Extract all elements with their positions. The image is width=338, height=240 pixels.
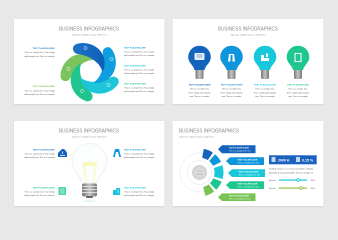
text block: left top: add sample text This is a sample	[24, 55, 55, 58]
text block: bulb 4: TEXT PLACEHOLDER	[287, 84, 309, 86]
text block: left bottom: This is a sample text. You simply	[24, 89, 55, 92]
text block: right top: TEXT PLACEHOLDER	[124, 46, 146, 50]
text block: bulb 4	[287, 84, 310, 98]
text block: left bottom: add sample text This is a sample	[24, 93, 55, 96]
icon: document green	[58, 187, 66, 195]
text block: bulb 2: This is a sample text.	[222, 88, 242, 90]
bulb: cyan	[254, 46, 276, 79]
text block: bottom left: This is a sample text. You simply	[24, 190, 55, 193]
paragraph: Today, there is a text example simply	[269, 168, 314, 170]
text block: right top: This is a sample text. You simply	[124, 50, 155, 54]
ribbon 5: TEXT PLACEHOLDER	[229, 194, 249, 198]
text block: top left	[24, 148, 55, 159]
stats box	[269, 155, 317, 164]
text block: right bottom: TEXT PLACEHOLDER	[124, 82, 146, 86]
title: large bulb slide: BUSINESS INFOGRAPHICS	[59, 128, 119, 134]
text block: right middle: This is a sample text. You simply	[124, 68, 155, 72]
text block: right top	[124, 46, 155, 57]
text block: right top: add sample text This is a sample	[124, 54, 155, 57]
text block: left top	[24, 47, 55, 58]
fan segments	[172, 145, 227, 200]
bulb: dark blue	[188, 46, 211, 79]
text block: bulb 2: TEXT PLACEHOLDER	[221, 84, 243, 86]
petal: green	[63, 62, 105, 104]
petal: dark blue	[73, 43, 105, 72]
subtitle: fan slide: Type the subtitle of your slide here	[179, 136, 214, 138]
center circle: TEXT	[197, 171, 203, 173]
text block: left bottom	[24, 85, 55, 96]
large light bulb	[72, 144, 107, 202]
panel: swirl slide	[14, 19, 164, 104]
swirl chart	[58, 43, 121, 104]
text block: left bottom: TEXT PLACEHOLDER	[33, 85, 55, 88]
title: fan slide: BUSINESS INFOGRAPHICS	[179, 128, 239, 134]
petal: lime	[58, 49, 96, 88]
text block: right bottom	[124, 82, 155, 93]
text block: left top: This is a sample text. You simply	[24, 51, 55, 54]
text block: bottom right: This is a sample text. You simply	[124, 190, 155, 193]
subtitle: bulbs slide: Type the subtitle of your slide here	[230, 34, 266, 36]
text block: bulb 2	[220, 84, 243, 98]
center circle: HERE	[197, 174, 203, 176]
center circle	[192, 165, 207, 180]
ribbon 4: This is a sample text. You	[238, 185, 259, 188]
text block: top left: TEXT PLACEHOLDER	[33, 148, 55, 152]
text block: bulb 3: TEXT PLACEHOLDER	[254, 84, 276, 86]
slider 1: 80%	[311, 180, 315, 182]
text block: bulb 4: This is a sample text.	[288, 88, 308, 90]
slider 2	[269, 187, 315, 190]
dashed rings	[180, 153, 219, 192]
stats box: 0.15 %	[302, 159, 314, 163]
title: swirl slide: BUSINESS INFOGRAPHICS	[59, 26, 119, 32]
subtitle: swirl slide: Type the subtitle of your slide here	[72, 34, 107, 36]
icon: team cyan	[113, 188, 120, 195]
text block: bulb 2: Ever simply add sample	[220, 91, 243, 94]
petal: cyan	[78, 60, 121, 102]
ribbon 5	[218, 193, 256, 201]
text block: top right	[124, 148, 155, 159]
text block: bulb 1: text. This is a sample	[190, 95, 210, 98]
ribbon 1: This is a sample text. You	[229, 150, 250, 152]
subtitle: large bulb slide: Type the subtitle of your slide here	[72, 136, 107, 138]
text block: right middle	[124, 64, 155, 75]
text block: bulb 4: Ever simply add sample	[287, 91, 310, 94]
ribbon 4	[226, 181, 264, 189]
slider 1	[269, 179, 315, 182]
stats box: 2000 K	[278, 159, 290, 163]
icon: people dark blue	[58, 149, 67, 157]
text block: top right: TEXT PLACEHOLDER	[124, 148, 146, 152]
text block: bulb 2: text. This is a sample	[222, 95, 242, 98]
text block: bulb 3: Ever simply add sample	[254, 91, 277, 94]
title: bulbs slide: BUSINESS INFOGRAPHICS	[218, 26, 278, 32]
ribbon 2: This is a sample text. You	[238, 161, 259, 164]
ribbon 3	[228, 169, 265, 177]
paragraph: Sample text placeholder of the sample is	[269, 172, 313, 174]
ribbon 1	[218, 145, 256, 153]
icon: handshake light blue	[113, 149, 121, 157]
text block: bulb 3: text. This is a sample	[255, 95, 276, 98]
ribbon 3: TEXT PLACEHOLDER	[238, 170, 259, 173]
panel: large bulb slide	[14, 121, 164, 206]
text block: bulb 3: This is a sample text.	[255, 88, 275, 90]
ribbon 1: TEXT PLACEHOLDER	[229, 146, 249, 150]
text block: top right: add sample text This is a sample	[124, 156, 155, 159]
text block: bulb 4: text. This is a sample	[288, 95, 309, 98]
slider 2: Search	[269, 187, 276, 190]
text block: bulb 3	[254, 84, 277, 98]
text block: right bottom: This is a sample text. You simply	[124, 86, 155, 90]
petal: light blue	[84, 46, 121, 85]
text block: bottom left: TEXT PLACEHOLDER	[33, 186, 55, 190]
text block: bulb 1: TEXT PLACEHOLDER	[189, 84, 211, 86]
petal icons	[67, 46, 113, 92]
text block: right middle: add sample text This is a sample	[124, 72, 155, 75]
text block: bottom right: add sample text This is a sample	[124, 194, 155, 197]
text block: top left: This is a sample text. You simply	[24, 152, 55, 155]
ribbon 2: TEXT PLACEHOLDER	[238, 158, 258, 161]
ribbon 2	[226, 157, 264, 165]
text block: top right: This is a sample text. You simply	[124, 152, 155, 155]
text block: top left: add sample text This is a sample	[24, 156, 55, 159]
text block: bottom left: add sample text This is a sample	[24, 194, 55, 197]
slider 2: 80%	[311, 188, 315, 190]
text block: bottom right	[124, 186, 155, 197]
text block: bottom left	[24, 186, 55, 197]
ribbon 3: This is a sample text. You	[238, 173, 260, 176]
text block: right bottom: add sample text This is a sample	[124, 90, 155, 93]
text block: bottom right: TEXT PLACEHOLDER	[124, 186, 146, 190]
ribbon 4: TEXT PLACEHOLDER	[238, 182, 258, 185]
paragraph	[269, 168, 314, 174]
text block: bulb 1	[188, 84, 211, 98]
panel: four bulbs slide	[172, 19, 324, 104]
bulb: light blue	[220, 46, 243, 79]
text block: left top: TEXT PLACEHOLDER	[33, 47, 55, 50]
bulb: green	[287, 46, 309, 79]
panel: fan and ribbons slide	[172, 121, 324, 206]
text block: bulb 1: This is a sample text.	[190, 88, 210, 90]
text block: bulb 1: Ever simply add sample	[188, 91, 211, 94]
ribbon 5: This is a sample text. You	[229, 198, 250, 200]
text block: right middle: TEXT PLACEHOLDER	[124, 64, 146, 68]
slider 1: Search	[269, 179, 276, 182]
